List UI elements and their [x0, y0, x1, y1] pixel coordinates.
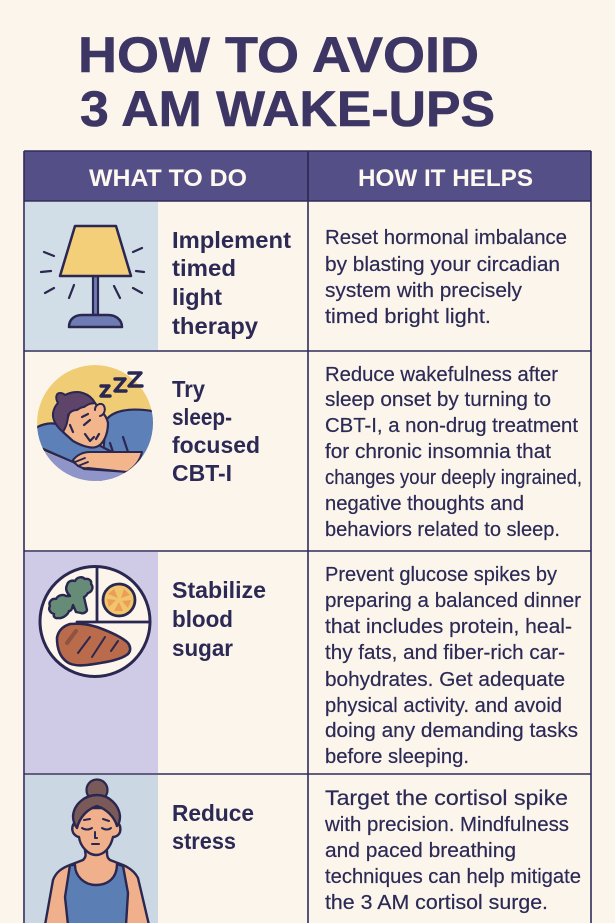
row 1 image panel: [25, 202, 158, 350]
row 4 image panel: [25, 775, 158, 923]
icon: sleep z letters: [101, 373, 142, 396]
torso and arms: [45, 851, 149, 923]
row 2 action: Try: [172, 376, 205, 402]
row 2 benefit: negative thoughts and: [325, 492, 524, 515]
row 4 action: [172, 800, 254, 854]
ear: [95, 404, 105, 416]
row 1 benefit: timed bright light.: [325, 305, 491, 328]
icon: broccoli: [49, 577, 92, 618]
row 3 benefit: thy fats, and fiber-rich car-: [325, 641, 565, 664]
row 1 benefit: system with precisely: [325, 279, 523, 302]
hair: [73, 795, 120, 828]
blanket: [44, 452, 126, 481]
row 4 benefit: and paced breathing: [325, 839, 516, 862]
table header: HOW IT HELPS: [358, 165, 533, 192]
tank top: [65, 864, 128, 923]
row 4 benefit: with precision. Mindfulness: [324, 813, 569, 836]
row 1 benefit: by blasting your circadian: [325, 253, 560, 276]
row 2 benefit: behaviors related to sleep.: [325, 518, 560, 541]
icon: orange slice: [103, 584, 135, 616]
table header: [24, 151, 591, 201]
row 2 action: [172, 376, 260, 486]
row 2 action: sleep-: [172, 404, 232, 430]
title: 3 AM WAKE-UPS: [80, 81, 495, 137]
row 3 benefit: bohydrates. Get adequate: [325, 668, 565, 691]
row 3 benefit: doing any demanding tasks: [325, 719, 578, 742]
row 4 action: Reduce: [172, 800, 254, 826]
head: [72, 808, 120, 855]
icon: lamp: [41, 226, 144, 327]
face features: [82, 819, 111, 844]
row 2 benefit: Reduce wakefulness after: [325, 363, 558, 386]
row 3 action: blood: [172, 606, 233, 632]
row 4 benefit: techniques can help mitigate: [325, 865, 581, 888]
row 1 action: light: [172, 284, 222, 310]
table header: WHAT TO DO: [89, 165, 247, 192]
row 1 action: therapy: [172, 313, 258, 339]
row 4 benefit: the 3 AM cortisol surge.: [325, 891, 548, 914]
row 1 action: Implement: [172, 227, 291, 253]
row 1 action: [172, 227, 291, 339]
row 3 action: [172, 577, 266, 661]
row 3 image panel: [25, 552, 158, 773]
row 3 benefit: [325, 563, 581, 768]
face: [63, 403, 108, 448]
icon: plate: [40, 566, 150, 676]
shoulder and body: [100, 408, 153, 481]
row 2 benefit: sleep onset by turning to: [325, 388, 551, 411]
arm: [73, 452, 142, 472]
row 4 action: stress: [172, 828, 236, 854]
bun: [86, 780, 108, 800]
row 1 action: timed: [172, 255, 236, 281]
title: HOW TO AVOID: [78, 27, 479, 83]
row 3 benefit: Prevent glucose spikes by: [325, 563, 558, 586]
row 1 benefit: [325, 226, 567, 328]
row 3 action: sugar: [172, 635, 233, 661]
table grid: [24, 151, 591, 923]
body lines: [110, 437, 128, 452]
row 2 benefit: changes your deeply ingrained,: [325, 466, 582, 489]
row 4 benefit: Target the cortisol spike: [325, 786, 568, 810]
pillow: [37, 422, 112, 463]
row 3 benefit: that includes protein, heal-: [325, 615, 572, 638]
row 2 benefit: CBT-I, a non-drug treatment: [325, 414, 578, 437]
icon: steak: [57, 624, 130, 665]
face features: [70, 414, 99, 441]
row 3 benefit: before sleeping.: [325, 745, 469, 768]
row 2 benefit: [325, 363, 582, 541]
icon: woman meditating: [45, 780, 149, 923]
row 2 action: focused: [172, 432, 260, 458]
title: [78, 27, 495, 137]
row 2 action: CBT-I: [172, 460, 232, 486]
row 3 benefit: preparing a balanced dinner: [325, 589, 581, 612]
row 1 benefit: Reset hormonal imbalance: [325, 226, 567, 249]
row 3 action: Stabilize: [172, 577, 266, 603]
row 2 image: sleeping person: [37, 365, 153, 481]
row 3 benefit: physical activity. and avoid: [325, 694, 562, 717]
row 2 benefit: for chronic insomnia that: [325, 440, 551, 463]
row 4 benefit: [324, 786, 581, 914]
hair: [53, 392, 95, 432]
